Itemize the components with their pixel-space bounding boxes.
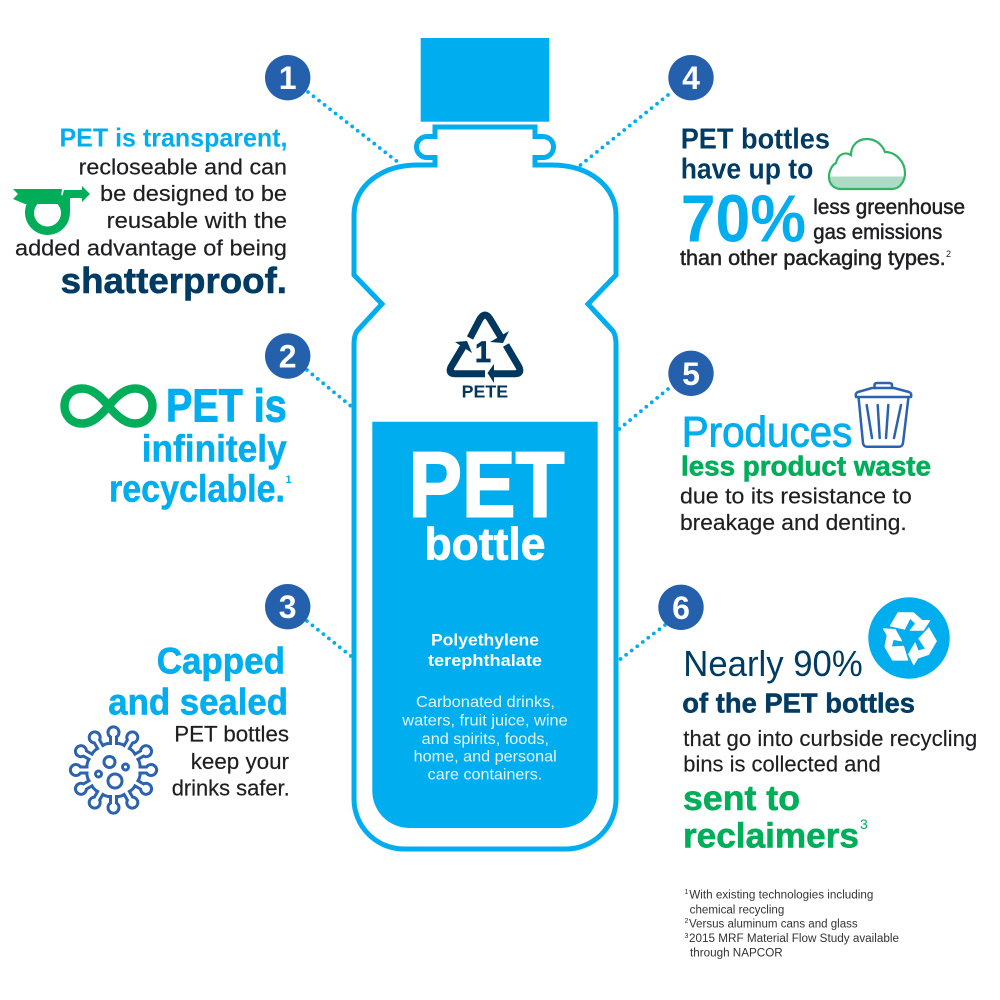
- body text 1: reusable with the: [107, 208, 287, 233]
- footnotes: 3: [684, 933, 688, 940]
- icon: reuse arrow: [13, 186, 90, 235]
- body text 3: [172, 722, 290, 801]
- stat: 70%: 70%: [681, 182, 806, 257]
- badge 1: 1: [279, 60, 297, 96]
- heading 2: infinitely: [142, 429, 287, 471]
- body text 6: bins is collected and: [683, 752, 881, 777]
- body text 1: added advantage of being: [15, 236, 287, 261]
- heading 4: PET bottles: [681, 123, 830, 155]
- heading 4: have up to: [681, 153, 813, 185]
- footnotes: With existing technologies including: [689, 889, 873, 901]
- body text 4: gas emissions: [813, 221, 942, 244]
- panel 1: transparent: [13, 55, 310, 301]
- body text 1: be designed to be: [100, 181, 287, 206]
- label title: bottle: [424, 518, 546, 570]
- body text 3: PET bottles: [174, 722, 289, 747]
- heading 2: recyclable.: [109, 469, 285, 511]
- badge 6: [658, 585, 704, 630]
- footnotes: [684, 889, 899, 960]
- icon: infinity loop: [64, 388, 152, 424]
- body text 5: due to its resistance to: [680, 483, 912, 508]
- label uses text: care containers.: [428, 766, 542, 783]
- badge 1: [265, 55, 310, 100]
- dotted connector lines: [307, 92, 668, 661]
- panel 3: capped and sealed: [70, 584, 310, 813]
- icon: trash bin: [856, 383, 911, 447]
- icon: recycling code 1 PETE: 1: [475, 336, 491, 369]
- panel 6: collected and reclaimed: [658, 585, 977, 856]
- emphasis: sent to reclaimers: [683, 779, 868, 856]
- panel 2: infinitely recyclable: [64, 333, 310, 511]
- badge 4: [668, 55, 714, 100]
- heading 1: PET is transparent,: [60, 123, 288, 153]
- bottle cap: [421, 38, 549, 122]
- footnotes: 2015 MRF Material Flow Study available: [689, 933, 899, 945]
- label subtitle: [428, 632, 542, 670]
- body text 3: keep your: [191, 749, 290, 774]
- heading 2: 1: [286, 474, 292, 486]
- emphasis: sent to reclaimers: 3: [860, 816, 868, 832]
- heading 3: [108, 640, 288, 722]
- icon: virus: [70, 727, 157, 813]
- body text 4: [680, 196, 965, 270]
- label uses text: and spirits, foods,: [422, 731, 549, 748]
- heading 4: [681, 123, 830, 185]
- emphasis: less product waste: less product waste: [681, 451, 931, 482]
- footnotes: 2: [684, 918, 688, 925]
- bottle illustration: [354, 38, 616, 849]
- bottle outline: [354, 127, 616, 849]
- badge 4: 4: [682, 60, 700, 96]
- badge 3: 3: [279, 589, 297, 625]
- body text 1: recloseable and can: [79, 154, 287, 179]
- label title: [408, 432, 564, 570]
- heading 6: Nearly 90%: [683, 643, 863, 684]
- panel 4: greenhouse gas: [668, 55, 965, 270]
- icon: cloud: [829, 139, 905, 189]
- footnotes: through NAPCOR: [690, 948, 783, 960]
- icon: recycling code 1 PETE: [450, 315, 520, 402]
- body text 5: breakage and denting.: [680, 510, 907, 535]
- body text 3: drinks safer.: [172, 776, 290, 801]
- badge 5: 5: [682, 356, 700, 392]
- body text 6: [683, 726, 977, 777]
- emphasis: shatterproof: shatterproof.: [61, 260, 287, 301]
- badge 2: [265, 333, 310, 379]
- emphasis: sent to reclaimers: sent to: [683, 779, 800, 818]
- badge 3: [265, 584, 310, 629]
- label subtitle: terephthalate: [428, 652, 542, 670]
- body text 1: [15, 154, 287, 261]
- label uses text: Carbonated drinks,: [416, 694, 555, 711]
- body text 4: less greenhouse: [813, 196, 965, 219]
- body text 5: [680, 483, 912, 535]
- badge 5: [668, 351, 714, 396]
- label uses text: [401, 694, 568, 783]
- bottle label panel: [372, 422, 598, 828]
- icon: recycle circle: [868, 597, 950, 679]
- body text 4: 2: [946, 249, 951, 259]
- heading 2: PET is: [166, 380, 287, 432]
- panel 5: less waste: [668, 351, 931, 535]
- label uses text: waters, fruit juice, wine: [401, 713, 568, 730]
- icon: recycling code 1 PETE: PETE: [462, 382, 508, 402]
- footnotes: Versus aluminum cans and glass: [689, 918, 858, 930]
- body text 6: that go into curbside recycling: [683, 726, 977, 751]
- heading 3: and sealed: [108, 681, 288, 722]
- heading 3: Capped: [157, 640, 285, 681]
- label subtitle: Polyethylene: [431, 632, 539, 650]
- emphasis: sent to reclaimers: reclaimers: [683, 817, 859, 856]
- heading 2: [109, 380, 292, 511]
- footnotes: chemical recycling: [690, 904, 784, 916]
- badge 6: 6: [672, 590, 690, 626]
- subheading 6: of the PET bottles: [682, 688, 915, 719]
- body text 4: than other packaging types.: [680, 247, 946, 270]
- footnotes: 1: [684, 889, 688, 896]
- label uses text: home, and personal: [414, 749, 557, 766]
- heading 5: Produces: [682, 409, 852, 457]
- badge 2: 2: [279, 338, 297, 374]
- label title: PET: [408, 432, 564, 536]
